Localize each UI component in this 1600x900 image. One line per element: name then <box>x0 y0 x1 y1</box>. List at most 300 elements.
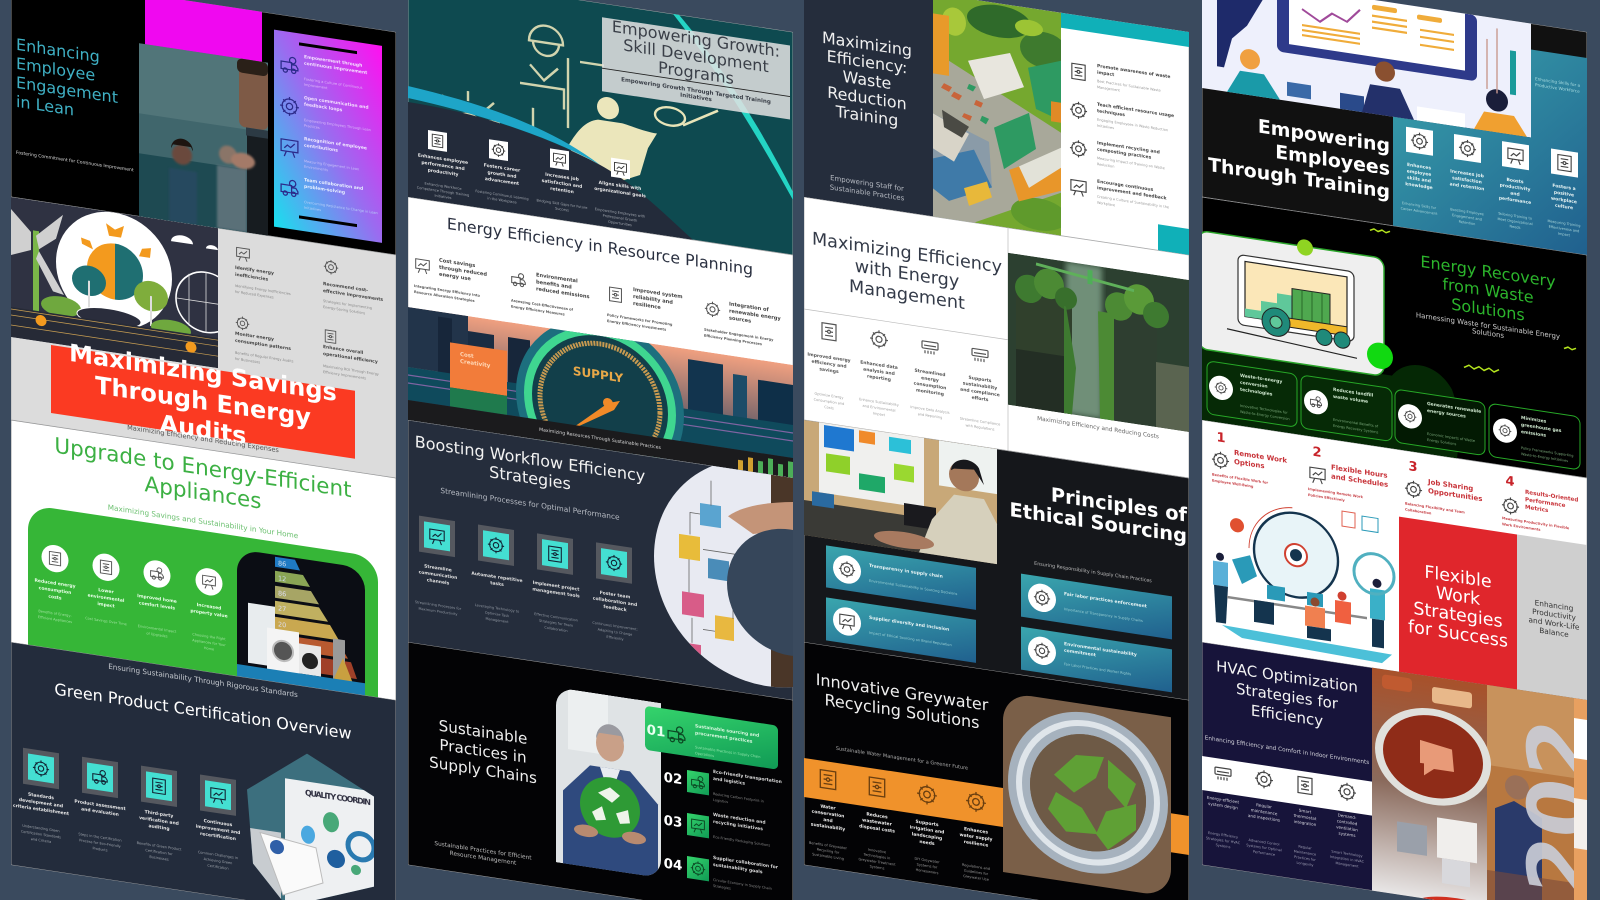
step 03: recycling initiatives <box>713 819 763 832</box>
step: feedback <box>592 542 638 644</box>
item: career: in the Workplace <box>487 196 517 205</box>
item: disposal costs: Innovative <box>868 848 886 854</box>
panel: Sustainable Practices in Supply Chains <box>408 642 793 900</box>
item: resilience: water supply <box>960 832 993 843</box>
photo: appliances and energy ratings: 86 <box>278 559 286 568</box>
step: improvement: recertification <box>200 831 236 842</box>
card: landfill: waste volume <box>1333 394 1368 405</box>
item: performance <box>417 128 469 203</box>
step: communication: Maximum Productivity <box>419 607 457 616</box>
item: renewables: Efficiency Planning Processes <box>704 334 762 346</box>
title: Sustainable <box>439 717 527 748</box>
step: standards: and Criteria <box>31 837 51 844</box>
photo: man at whiteboard <box>804 415 997 564</box>
card: environmental commitment: Environmental sustainability <box>1064 641 1137 658</box>
card: environmental commitment: Fair Labor Practices and Worker Rights <box>1064 662 1131 676</box>
option 3: Balancing Flexibility and Team <box>1405 502 1465 515</box>
item: conservation: conservation <box>812 809 844 820</box>
option 2: Implementing Remote Work <box>1308 487 1364 499</box>
card: greenhouse <box>1489 403 1580 470</box>
item: renewables <box>704 298 781 349</box>
title: Supply Chains <box>429 753 537 787</box>
illustration: chalkboard trainer <box>442 24 718 180</box>
right accent curve <box>673 14 793 200</box>
item: irrigation <box>910 782 944 876</box>
item: compliance: Supports <box>969 375 992 384</box>
card: conversion: technologies <box>1240 387 1273 398</box>
item: satisfaction: Increases job <box>545 172 580 183</box>
item: satisfaction: satisfaction <box>1452 175 1482 186</box>
item: savings: Optimize Energy <box>815 392 843 400</box>
step: automate <box>471 524 523 626</box>
gradient list card: Measuring Engagement in Lean <box>304 159 359 171</box>
dark green blob <box>1202 333 1459 459</box>
item: renewables: Integration of <box>729 301 769 313</box>
list item: resource usage: techniques <box>1097 108 1125 118</box>
item: reduced consumption <box>34 542 76 625</box>
item: resilience: Enhances <box>964 826 988 836</box>
item: performance: Initiatives <box>434 194 452 200</box>
item: enhance: Maximizing ROI Through Energy <box>323 364 379 376</box>
card: environmental commitment: commitment <box>1064 648 1097 659</box>
list item: resource usage <box>1070 98 1174 139</box>
step: assessment: Process for Eco-Friendly <box>79 838 121 849</box>
list item: feedback: Encourage continuous <box>1097 179 1154 193</box>
step: feedback: collaboration and <box>593 596 637 608</box>
gradient list card: Recognition of employee <box>304 136 367 152</box>
gradient list card: Empowering Employees Through Lean <box>304 118 371 132</box>
item: ventilation: Integration in HVAC <box>1330 855 1365 864</box>
subtitle: Productivity <box>1532 607 1577 622</box>
item: thermostat: Longevity <box>1296 861 1314 867</box>
gray block <box>1517 534 1587 701</box>
card: renewable: Generates renewable <box>1427 401 1481 415</box>
item: reliability: Energy Efficiency Investments <box>607 319 666 332</box>
illustration: team around target dial <box>1213 492 1394 665</box>
item: recommend <box>323 259 383 318</box>
list item: recycling: Implement recycling and <box>1097 140 1160 156</box>
item: compliance: efforts <box>972 395 989 403</box>
item: alignment: organizational goals <box>594 186 646 200</box>
option 1: 1 <box>1216 430 1226 447</box>
step: feedback: Continuous Improvement: <box>592 621 638 632</box>
item: property value: Increased <box>197 602 221 612</box>
item: satisfaction: retention <box>550 186 574 195</box>
subtitle: Maximizing Efficiency and Reducing Expenses <box>127 424 279 454</box>
item: resilience: resilience <box>964 839 988 849</box>
item: lower impact <box>85 551 127 626</box>
step: feedback: Foster team <box>600 590 631 601</box>
red title block <box>1399 517 1517 690</box>
step: verification: Benefits of Green Product <box>137 841 182 852</box>
item: skills <box>1401 126 1438 216</box>
item: reduced consumption: costs <box>48 594 62 602</box>
card: supplier diversity <box>826 597 976 663</box>
card: conversion: conversion <box>1240 380 1268 390</box>
item: productivity: and <box>1510 190 1520 198</box>
title: Through Training <box>1208 154 1390 203</box>
step: improvement: improvement and <box>196 824 240 836</box>
item: performance: Competence Through Training <box>417 186 469 198</box>
card: greenhouse: Waste-to-Energy Initiatives <box>1521 452 1568 463</box>
subtitle: Resource Management <box>450 851 517 867</box>
item: productivity: performance <box>1499 195 1531 206</box>
gradient list card: Practices <box>304 124 320 130</box>
subtitle: Empowering Staff for <box>830 173 904 193</box>
item: resilience <box>960 790 993 882</box>
list item: feedback <box>1071 175 1169 215</box>
item: environmental: Environmental <box>536 272 578 285</box>
title: from Waste <box>1442 274 1534 307</box>
orange band <box>804 758 1189 855</box>
title: Engagement <box>16 73 118 107</box>
item: career: Fosters career <box>484 162 521 174</box>
item: satisfaction: Retention <box>1459 220 1475 226</box>
item: system design: Systems <box>1216 843 1231 849</box>
option 1: Options <box>1234 457 1265 470</box>
card: transparency <box>826 545 976 610</box>
step: standards: Standards <box>28 792 54 802</box>
title: Flexible <box>1424 563 1492 593</box>
item: compliance: Streamline Compliance <box>960 416 1000 427</box>
step 03: 03 <box>664 813 682 831</box>
list item: resource usage: Teach efficient resource usage <box>1097 102 1174 119</box>
option 4: 4 <box>1505 474 1515 490</box>
image: city and gauge: Maximizing Resources Through Sustainable Practices <box>539 427 661 451</box>
option 3 <box>1405 459 1482 523</box>
panel: Upgrade to Energy-Efficient Appliances <box>11 420 396 730</box>
item: comfort <box>137 558 177 640</box>
teal top bar <box>1061 13 1189 47</box>
list item: awareness: impact <box>1097 70 1115 78</box>
subtitle: Fostering Commitment for Continuous Improvement <box>16 150 134 173</box>
item: monitor: Monitor energy <box>235 331 274 343</box>
list item: awareness: Best Practices for Sustainable Waste <box>1097 79 1161 93</box>
step 03 <box>664 805 770 848</box>
step: verification: auditing <box>148 823 170 832</box>
step: project tools: Implement project <box>533 580 580 593</box>
item: reliability: Policy Frameworks for Promoting <box>607 313 673 327</box>
card: greenhouse: emissions <box>1521 429 1546 439</box>
step: standards: development and <box>19 797 63 810</box>
item: culture: Measuring Training <box>1548 219 1580 228</box>
card: landfill <box>1301 375 1392 442</box>
item: data analysis <box>859 327 899 419</box>
panel: Boosting Workflow Efficiency Strategies <box>408 400 853 710</box>
item: thermostat: integration <box>1294 819 1317 827</box>
option 2: Policies Effectively <box>1308 493 1346 503</box>
caption: Productive Workforce <box>1535 82 1580 94</box>
card: environmental commitment <box>1021 627 1172 692</box>
green card <box>28 508 378 698</box>
item: ventilation: Management <box>1336 861 1359 869</box>
step: verification: verification and <box>139 815 179 827</box>
step 02 <box>664 762 782 812</box>
option 4: Measuring Productivity in Flexible <box>1502 516 1570 530</box>
illustration: wind turbines and sun <box>11 197 236 371</box>
item: comfort: Environmental Impact <box>138 624 177 634</box>
option 4: Performance <box>1525 497 1566 509</box>
card: landfill: Energy Recovery Systems <box>1333 424 1379 435</box>
item: system design: Strategies for HVAC <box>1206 836 1241 845</box>
title: HVAC Optimization <box>1216 657 1358 696</box>
item: skills: skills and <box>1407 175 1431 184</box>
item: monitoring: energy <box>921 375 939 384</box>
subtitle: Sustainable Practices <box>830 182 905 203</box>
item: reliability: resilience <box>633 301 661 311</box>
item: disposal costs: disposal costs <box>859 823 895 835</box>
option 3: 3 <box>1408 459 1418 475</box>
item: culture: culture <box>1555 203 1573 211</box>
list item: resource usage: Initiatives <box>1097 124 1114 130</box>
step: project tools: Effective Communication <box>534 612 578 623</box>
option 4: Metrics <box>1525 505 1549 514</box>
text box: Empowering Growth: <box>612 17 780 61</box>
list item: resource usage: Engaging Employees in Waste Reduction <box>1097 118 1168 132</box>
item: savings: Costs <box>824 405 834 411</box>
item: monitor <box>235 316 294 364</box>
item: lower impact: Lower <box>98 587 114 596</box>
item: culture: Fosters a <box>1552 183 1576 192</box>
item: data analysis: and Environmental <box>863 404 896 413</box>
item: satisfaction <box>1450 133 1485 228</box>
title: Energy Recovery <box>1420 252 1556 291</box>
panel: Maximizing Efficiency with Energy Management <box>804 197 1189 478</box>
item: enhance <box>323 329 379 382</box>
list item: recycling: Measuring Impact of Training on Waste <box>1097 156 1165 170</box>
title: Efficiency <box>1251 701 1323 730</box>
step 03: Eco-Friendly Packaging Solutions <box>713 835 770 848</box>
item: performance: Enhancing Workforce <box>425 182 461 191</box>
item: system design: Energy-efficient <box>1207 795 1240 805</box>
callout: step 01: Operations <box>695 751 714 758</box>
item: satisfaction: Success <box>555 206 569 213</box>
item: property value: property value <box>190 608 228 620</box>
card: transparency: Transparency in supply chain <box>869 563 943 580</box>
step: improvement: Common Challenges in <box>198 850 238 860</box>
callout: step 01: procurement practices <box>695 730 753 745</box>
title: Maximizing <box>822 28 912 60</box>
option 1: Remote Work <box>1234 448 1287 465</box>
item: thermostat <box>1294 776 1317 868</box>
card: supplier diversity: Impact of Ethical Sourcing on Brand Reputation <box>869 631 952 647</box>
card: fair labor <box>1021 574 1172 639</box>
item: resilience: Guidelines for <box>964 869 989 876</box>
photo: appliances and energy ratings: 27 <box>278 604 286 613</box>
title: Employees <box>1275 141 1390 180</box>
list item: awareness <box>1072 59 1170 100</box>
list item: feedback: Workplace <box>1097 201 1115 207</box>
item: environmental: Assessing Cost-Effectiveness of <box>511 299 574 312</box>
title: Strategies for <box>1236 680 1339 713</box>
item: maintenance: and inspections <box>1248 813 1280 823</box>
item: lower impact: Cost Savings Over Time <box>85 616 127 626</box>
title: for Success <box>1408 617 1508 652</box>
option 4: Results-Oriented <box>1525 490 1578 504</box>
title: with Energy <box>855 257 959 292</box>
subtitle: Solutions <box>1472 326 1504 340</box>
gradient list card: problem-solving <box>304 184 345 196</box>
step: improvement: Certification <box>207 864 229 871</box>
panel: Maximizing Efficiency: Waste Reduction Training <box>804 0 1189 255</box>
item: lower impact: environmental <box>88 593 125 604</box>
item: satisfaction: and retention <box>1450 181 1484 193</box>
item: cost savings: Cost savings <box>439 258 475 269</box>
step: verification: Third-party <box>145 809 173 819</box>
gradient list card: contributions <box>304 143 338 154</box>
photo: appliances and energy ratings <box>237 552 365 696</box>
text box <box>602 15 790 120</box>
item: system design: Energy Efficiency <box>1208 831 1238 839</box>
item: recommend: Energy-Saving Solutions <box>323 305 365 315</box>
title: in Lean <box>16 92 74 119</box>
item: comfort: Improved home <box>137 593 177 605</box>
step: automate: Automate repetitive <box>471 571 523 584</box>
item: skills: knowledge <box>1405 181 1433 191</box>
title: Management <box>849 277 965 314</box>
step: automate: Leveraging Technology to <box>475 603 519 614</box>
item: comfort: of Upgrades <box>146 631 168 639</box>
title: Training <box>835 102 898 130</box>
step: communication: communication <box>419 569 457 581</box>
item: irrigation: irrigation and <box>910 824 944 836</box>
item: disposal costs: Systems <box>870 864 885 871</box>
photo: appliances and energy ratings: 20 <box>278 620 286 629</box>
item: system design <box>1206 766 1241 851</box>
title: Reduction <box>827 83 907 113</box>
item: comfort: comfort levels <box>139 600 175 612</box>
image: city and gauge <box>408 291 793 517</box>
title: Solutions <box>1451 295 1525 325</box>
card: renewable: Energy Solutions <box>1427 438 1456 446</box>
item: alignment: Professional Growth <box>603 214 637 223</box>
item: career: growth and <box>487 170 517 180</box>
step: automate: Optimize Task <box>485 611 510 618</box>
item: irrigation: needs <box>919 839 935 847</box>
step 04: Strategies <box>713 884 731 891</box>
item: ventilation: Demand- <box>1338 812 1357 820</box>
decor: green circles <box>1297 238 1393 371</box>
gradient list card: Team collaboration and <box>304 177 363 192</box>
step: assessment <box>74 756 126 855</box>
item: thermostat: thermostat <box>1294 813 1317 821</box>
subtitle: Maximizing Savings and Sustainability in Your Home <box>108 503 299 540</box>
item: property value <box>190 566 228 654</box>
card: renewable: energy sources <box>1427 408 1466 420</box>
item: satisfaction: Increases job <box>1450 168 1485 180</box>
item: data analysis: Impact <box>873 411 886 417</box>
panel: HVAC Optimization Strategies for Efficiency <box>1202 642 1600 900</box>
item: alignment: Empowering Employees with <box>595 207 645 219</box>
item: skills: employee <box>1407 168 1431 178</box>
photo: appliances and energy ratings: 12 <box>278 574 286 583</box>
subtitle: and Work-Life <box>1529 615 1580 632</box>
item: cost savings: through reduced <box>439 265 487 278</box>
photo: workflow sticky notes <box>648 436 853 710</box>
gradient list card: Empowerment through <box>304 54 362 69</box>
decor: zigzags <box>1370 228 1576 384</box>
title: Recycling Solutions <box>825 690 979 732</box>
list item: awareness: Promote awareness of waste <box>1097 63 1170 80</box>
item: skills: Career Advancement <box>1401 206 1438 216</box>
card: supplier diversity: Supplier diversity and inclusion <box>869 615 949 633</box>
card: fair labor: Fair labor practices enforcement <box>1064 591 1148 610</box>
step 02: Logistics <box>713 798 728 804</box>
item: resilience: Greywater Use <box>963 874 989 882</box>
title: Boosting Workflow Efficiency <box>415 432 646 486</box>
item: lower impact: impact <box>97 601 115 610</box>
title: Green Product Certification Overview <box>54 680 352 743</box>
item: maintenance: Performance <box>1253 850 1275 857</box>
title: Practices in <box>439 736 527 767</box>
item: irrigation: Homeowners <box>916 868 939 875</box>
text box: Skill Development <box>623 36 769 76</box>
item: monitoring: and Reporting <box>918 412 942 420</box>
item: data analysis: analysis and <box>863 366 895 377</box>
item: performance: performance and <box>421 160 465 172</box>
gradient list card: continuous improvement <box>304 61 368 76</box>
photo: blurred business team <box>139 43 268 236</box>
subtitle: Ensuring Sustainability Through Rigorous Standards <box>108 662 298 699</box>
panel: Empowering Employees Through Training <box>1202 0 1587 255</box>
item: culture: Effectiveness and <box>1549 225 1579 233</box>
subtitle: Enhancing Efficiency and Comfort in Indoor Environments <box>1205 735 1369 766</box>
list item: recycling: composting practices <box>1097 147 1152 161</box>
image: city and gauge: SUPPLY <box>573 364 623 385</box>
card: transparency: Environmental Sustainability in Sourcing Decisions <box>869 579 957 596</box>
item: reduced consumption: consumption <box>39 585 71 596</box>
panel: Empowering Growth: Skill Development Programs <box>408 0 793 255</box>
item: culture: Impact <box>1558 232 1571 238</box>
item: monitor: Benefits of Regular Energy Audits <box>235 351 294 364</box>
image: city and gauge: Cost <box>460 352 474 360</box>
item: maintenance <box>1246 768 1282 858</box>
card: conversion: Waste-to-energy <box>1240 373 1282 385</box>
callout: step 01: Sustainable Practices in Supply Chain <box>695 745 760 759</box>
list item: awareness: Management <box>1097 85 1121 93</box>
card: fair labor: Importance of Transparency in Supply Chains <box>1064 607 1143 623</box>
image: city and gauge: Creativity <box>460 359 491 369</box>
card: greenhouse: Policy Frameworks Supporting <box>1521 446 1573 458</box>
gradient list card: Open communication and <box>304 95 369 111</box>
item: satisfaction: Boosting Employee <box>1450 207 1484 216</box>
step: standards: criteria establishment <box>13 803 70 817</box>
item: alignment: Aligns skills with <box>599 180 641 192</box>
step: improvement: Continuous <box>204 818 233 828</box>
step: standards: Understanding Green <box>22 824 60 833</box>
item: identify: inefficiencies <box>235 272 268 283</box>
callout: step 01: Sustainable sourcing and <box>695 723 759 739</box>
panel: Green Product Certification Overview <box>11 642 396 900</box>
step 04: sustainability goals <box>713 862 763 875</box>
item: savings: efficiency and <box>811 359 847 370</box>
item: recommend: Strategies for Implementing <box>323 299 372 310</box>
item: disposal costs: Technologies in <box>863 852 890 860</box>
step 04: Circular Economy in Supply Chain <box>713 878 772 891</box>
option 1 <box>1212 430 1287 494</box>
item: productivity: productivity <box>1500 182 1530 193</box>
item: conservation <box>809 768 848 862</box>
card: greenhouse: greenhouse gas <box>1521 422 1562 434</box>
item: conservation: Benefits of Greywater <box>809 841 848 851</box>
option 2: and Schedules <box>1331 471 1388 489</box>
step: communication: channels <box>427 577 450 587</box>
photo: certificate hexagon <box>247 754 374 900</box>
item: productivity <box>1497 140 1533 232</box>
panel: Maximizing Savings Through Energy Audits <box>11 197 396 478</box>
option 3: Collaboration <box>1405 508 1432 516</box>
step 02: and logistics <box>713 776 745 787</box>
